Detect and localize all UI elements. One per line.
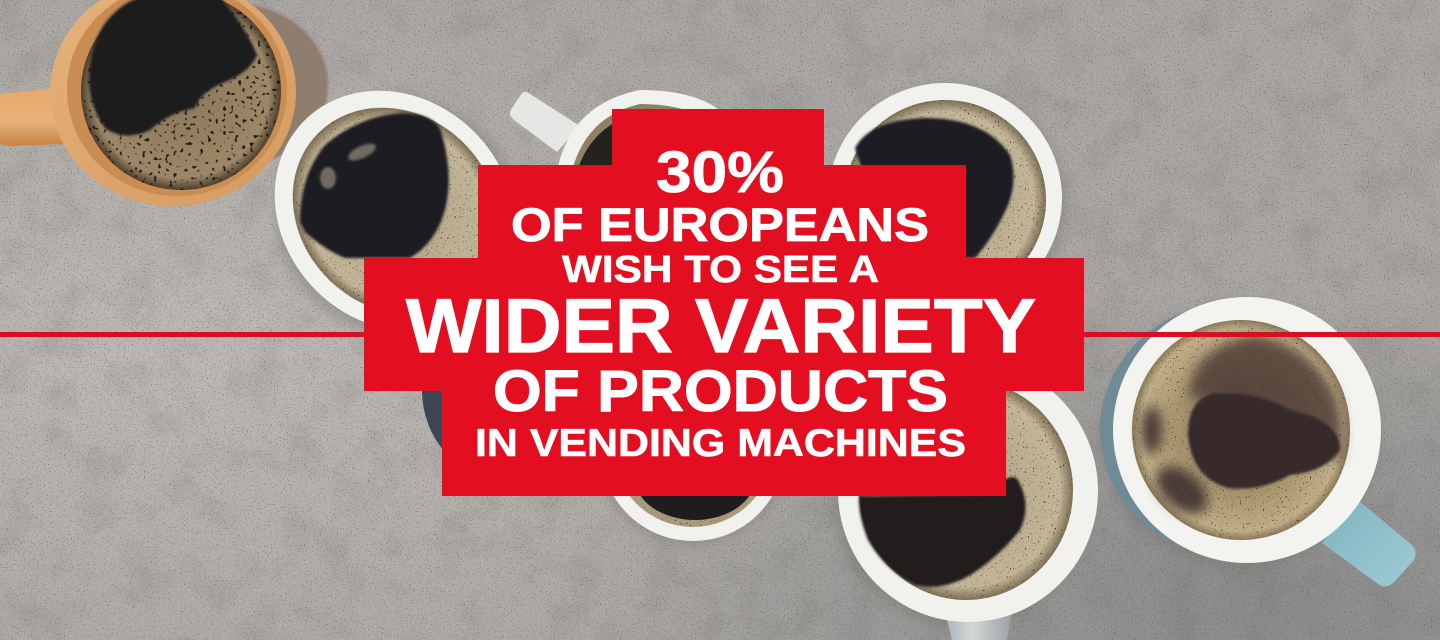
cup: top right white cup [828, 83, 1062, 313]
cup: bottom right white cup [838, 360, 1098, 640]
icon: teal handle [1322, 500, 1416, 587]
red horizontal line [0, 332, 1440, 337]
cup: blue cup hidden behind panel [422, 300, 588, 480]
icon: grey handle [945, 612, 1012, 640]
dark swirl in coffee [1142, 335, 1342, 523]
cup: top centre cup with handle [510, 90, 722, 190]
cup: teal mug on the right [1100, 297, 1416, 587]
icon: orange mug handle [0, 89, 64, 146]
headline text: WISH TO SEE A [562, 249, 879, 291]
orange mug shadow [136, 3, 328, 167]
headline text: WIDER VARIETY [406, 284, 1036, 369]
headline text: IN VENDING MACHINES [475, 422, 966, 465]
headline text: OF PRODUCTS [493, 359, 948, 424]
panel: red stepped banner [364, 109, 1084, 496]
cup shadows [276, 85, 1378, 626]
headline text: OF EUROPEANS [511, 198, 929, 251]
cup: top left white cup [225, 41, 565, 381]
cup: bottom centre cup [601, 359, 785, 541]
headline text [406, 140, 1036, 465]
foam patches on dark coffee [320, 140, 378, 189]
headline text: 30% [656, 140, 784, 205]
icon: white handle [510, 92, 580, 152]
cup: orange mug [0, 0, 296, 206]
